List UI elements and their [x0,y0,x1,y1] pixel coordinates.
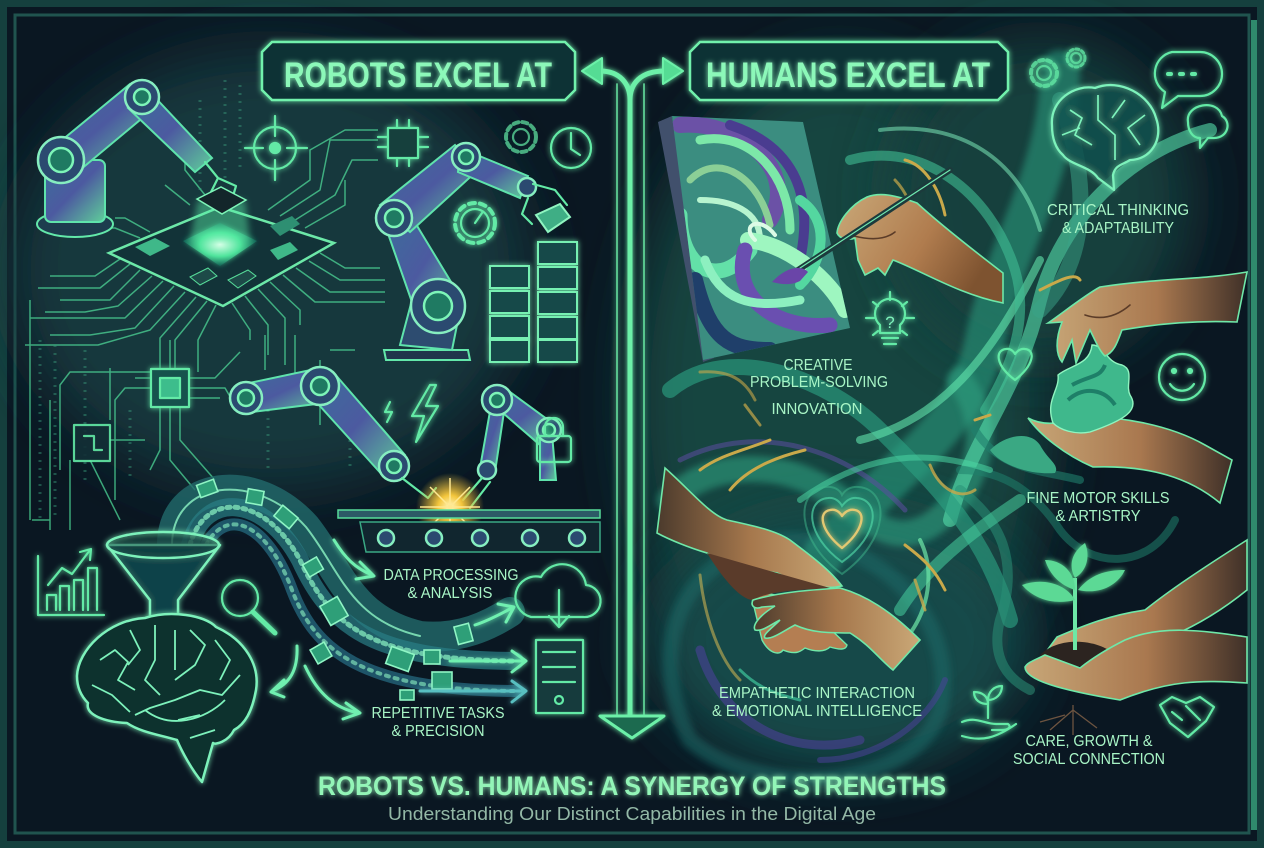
icon: gear [506,122,536,152]
icon: hand with seedling [962,686,1016,739]
label: fine motor skills: FINE MOTOR SKILLS [1026,490,1170,507]
icon: small chip [378,120,428,166]
icon: robot arm assembling chip [37,80,236,237]
binary dashes [40,80,350,520]
icon: glowing brain [1052,85,1158,190]
icon: clock [551,128,591,168]
label: empathetic interaction [712,685,922,720]
icon: funnel [107,532,220,630]
label: repetitive tasks: REPETITIVE TASKS [372,705,504,722]
label: data processing [384,567,518,602]
icon: clay lump [990,436,1056,473]
icon: gears [1031,49,1085,86]
icon: bar chart [38,549,104,615]
label: repetitive tasks: & PRECISION [392,723,484,740]
icon: stacking robot arm [376,143,570,360]
icon: lightning bolt [385,385,438,442]
icon: server [536,640,583,713]
icon: crosshair target [245,116,307,180]
label: critical thinking: CRITICAL THINKING [1047,202,1189,219]
icon: chip in circuit [151,369,189,407]
label: creative problem solving: PROBLEM-SOLVING [750,374,888,391]
label: creative problem solving: INNOVATION [772,401,862,418]
label: fine motor skills [1026,490,1170,525]
icon: lower hand holding clay [1028,417,1232,503]
arrows: stream outputs [271,540,526,719]
title: ROBOTS VS. HUMANS: A SYNERGY OF STRENGTHS [318,771,946,801]
circuit traces [25,130,385,530]
label: creative problem solving: CREATIVE [784,357,852,374]
icon: handshake [1160,697,1214,737]
icon: small heart [804,487,880,574]
heading: humans excel at [690,42,1008,100]
label: creative problem solving [750,357,888,418]
label: empathetic interaction: EMPATHETIC INTERACTION [719,685,915,702]
swirling energy [670,70,1210,779]
icon: hand with paintbrush [772,170,1003,303]
icon: upper hand pinching clay [1048,272,1247,363]
heading: robots excel at: ROBOTS EXCEL AT [284,56,552,95]
label: care growth: SOCIAL CONNECTION [1013,751,1165,768]
icon: heart outline [999,349,1032,380]
icon: padlock [537,418,571,462]
data stream [172,479,515,700]
label: critical thinking: & ADAPTABILITY [1062,220,1174,237]
icon: conveyor belt [338,510,600,552]
icon: smiley [1159,354,1205,400]
icon: workflow square [74,425,110,461]
label: empathetic interaction: & EMOTIONAL INTELLIGENCE [712,703,922,720]
icon: sculpted clay [1051,345,1133,433]
icon: welding robot arms [230,367,561,508]
icon: weld spark [416,473,484,541]
label: care growth [1013,733,1165,768]
heading: humans excel at: HUMANS EXCEL AT [706,56,990,95]
icon: circuit brain [77,614,257,782]
label: care growth: CARE, GROWTH & [1026,733,1153,750]
label: fine motor skills: & ARTISTRY [1056,508,1141,525]
icon: stacked cubes [490,242,577,362]
icon: glowing circuit chip [109,187,334,306]
panel: humans excel at [657,49,1247,779]
subtitle: Understanding Our Distinct Capabilities in the Digital Age [388,804,876,824]
heading: robots excel at [262,42,575,100]
icon: speech bubbles [1155,52,1228,148]
panel: robots excel at [25,80,601,782]
label: repetitive tasks [372,705,504,740]
arrow: central divider [582,58,683,738]
icon: hands holding sprout [1022,540,1247,735]
icon: clasped hands [657,468,920,670]
label: data processing: & ANALYSIS [408,585,492,602]
shelf line [373,363,600,365]
gold accents [700,160,1080,610]
label: critical thinking [1047,202,1189,237]
icon: lightbulb idea [866,292,914,344]
label: data processing: DATA PROCESSING [384,567,518,584]
icon: magnifier [222,580,275,633]
icon: canvas painting [658,116,850,362]
icon: lightbulb idea: ? [885,313,895,332]
icon: gauge gear [455,203,495,243]
icon: cloud download [515,564,601,627]
